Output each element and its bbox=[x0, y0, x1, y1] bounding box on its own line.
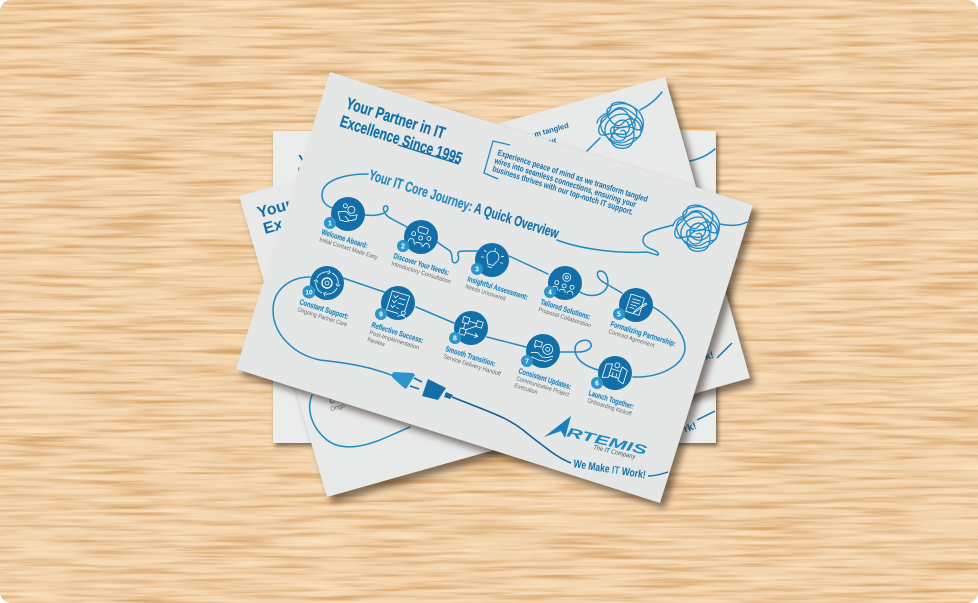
panel: back rotated card: C bbox=[328, 396, 336, 406]
step 8: smooth transition: 8 bbox=[453, 336, 457, 342]
step 9: reflective success: Post-Implementation bbox=[368, 330, 420, 352]
panel: back rotated card: Ongo bbox=[330, 403, 346, 413]
step 4: tailored solutions: Tailored Solutions: bbox=[539, 297, 592, 322]
panel: back rotated card bbox=[239, 77, 750, 497]
step 7: consistent updates: Communicative Project bbox=[515, 376, 570, 398]
step 5: formalizing partnership: 5 bbox=[617, 312, 621, 318]
step 8: smooth transition bbox=[442, 311, 502, 378]
step 10: constant support: 10 bbox=[305, 290, 313, 296]
step 9: reflective success bbox=[366, 286, 425, 352]
step 9: reflective success: 9 bbox=[379, 312, 383, 318]
step 1: welcome aboard: Welcome Aboard: bbox=[320, 227, 369, 250]
step 5: formalizing partnership bbox=[607, 288, 677, 349]
step 1: welcome aboard: Initial Contact Made Easy bbox=[318, 237, 378, 261]
step 5: formalizing partnership: Contract Agreement bbox=[607, 329, 655, 349]
panel: back rotated card: m tangled bbox=[533, 121, 570, 139]
card sheet bbox=[236, 72, 753, 503]
panel: back rotated card: ur bbox=[548, 135, 558, 146]
step 6: launch together: 6 bbox=[595, 380, 599, 388]
heading: your partner in IT: Excellence Since 1995 bbox=[338, 113, 464, 168]
tagline: we make IT work: We Make IT Work! bbox=[573, 458, 647, 481]
heading: your partner in IT: Your Partner in IT bbox=[344, 95, 447, 143]
step 10: constant support bbox=[296, 266, 350, 329]
journey wire bbox=[273, 174, 747, 377]
step 10: constant support: Ongoing Partner Care bbox=[296, 307, 348, 329]
logo: artemis: The IT Company bbox=[593, 444, 637, 461]
callout: peace of mind: Experience peace of mind as we transform tangled bbox=[496, 147, 649, 204]
step 4: tailored solutions: Proposal Collaboration bbox=[537, 307, 592, 329]
step 2: discover your needs bbox=[390, 220, 451, 286]
step 6: launch together: Onboarding Kickoff bbox=[586, 398, 632, 418]
panel: back straight card: E bbox=[298, 168, 302, 174]
icon: power plug bbox=[391, 372, 422, 389]
step 5: formalizing partnership: Formalizing Partnership: bbox=[609, 319, 677, 348]
panel: back rotated card: rk! bbox=[700, 350, 715, 364]
step 7: consistent updates: Consistent Updates: bbox=[517, 366, 573, 391]
step 6: launch together bbox=[586, 356, 635, 418]
panel: back straight card: rk! bbox=[682, 421, 698, 436]
icon: power socket and cable bbox=[422, 379, 571, 463]
panel: front card bbox=[236, 72, 753, 503]
step 3: insightful assessment bbox=[464, 243, 529, 303]
step 9: reflective success: Review bbox=[366, 337, 386, 348]
icon: tangled wire knot bbox=[673, 205, 719, 251]
step 7: consistent updates: 7 bbox=[525, 358, 529, 366]
step 10: constant support: Constant Support: bbox=[298, 297, 350, 321]
step 9: reflective success: Reflective Success: bbox=[370, 320, 425, 345]
step 1: welcome aboard bbox=[318, 197, 378, 261]
step 8: smooth transition: Smooth Transition: bbox=[444, 344, 497, 369]
heading: your partner in IT bbox=[338, 95, 464, 168]
step 7: consistent updates: Execution bbox=[513, 383, 538, 396]
heading: journey overview: Your IT Core Journey: A Quick Overview bbox=[367, 168, 561, 242]
step 2: discover your needs: Discover Your Needs: bbox=[392, 251, 450, 277]
step 6: launch together: Launch Together: bbox=[587, 388, 635, 411]
step 2: discover your needs: 2 bbox=[401, 244, 405, 250]
step 3: insightful assessment: Insightful Assessment: bbox=[466, 274, 529, 302]
step 3: insightful assessment: 3 bbox=[475, 266, 479, 274]
panel: back rotated card: Your bbox=[256, 196, 294, 222]
step 4: tailored solutions bbox=[537, 266, 592, 329]
callout: peace of mind bbox=[484, 141, 649, 217]
panel: back straight card: Y bbox=[298, 152, 308, 169]
step 1: welcome aboard: 1 bbox=[328, 220, 332, 228]
callout: peace of mind: wires into seamless connections, ensuring your bbox=[493, 155, 638, 209]
step 3: insightful assessment: Needs Uncovered bbox=[464, 284, 506, 303]
panel: back straight card bbox=[273, 131, 716, 443]
step 2: discover your needs: Introductory Consultation bbox=[390, 261, 451, 286]
logo: artemis: RTEMIS bbox=[565, 424, 649, 458]
logo: artemis bbox=[544, 416, 649, 461]
step 8: smooth transition: Service Delivery Handoff bbox=[442, 354, 502, 378]
step 4: tailored solutions: 4 bbox=[548, 290, 552, 296]
panel: back rotated card: Exc bbox=[262, 214, 294, 238]
callout: peace of mind: business thrives with our top-notch IT support. bbox=[491, 163, 635, 217]
step 7: consistent updates bbox=[513, 334, 573, 398]
